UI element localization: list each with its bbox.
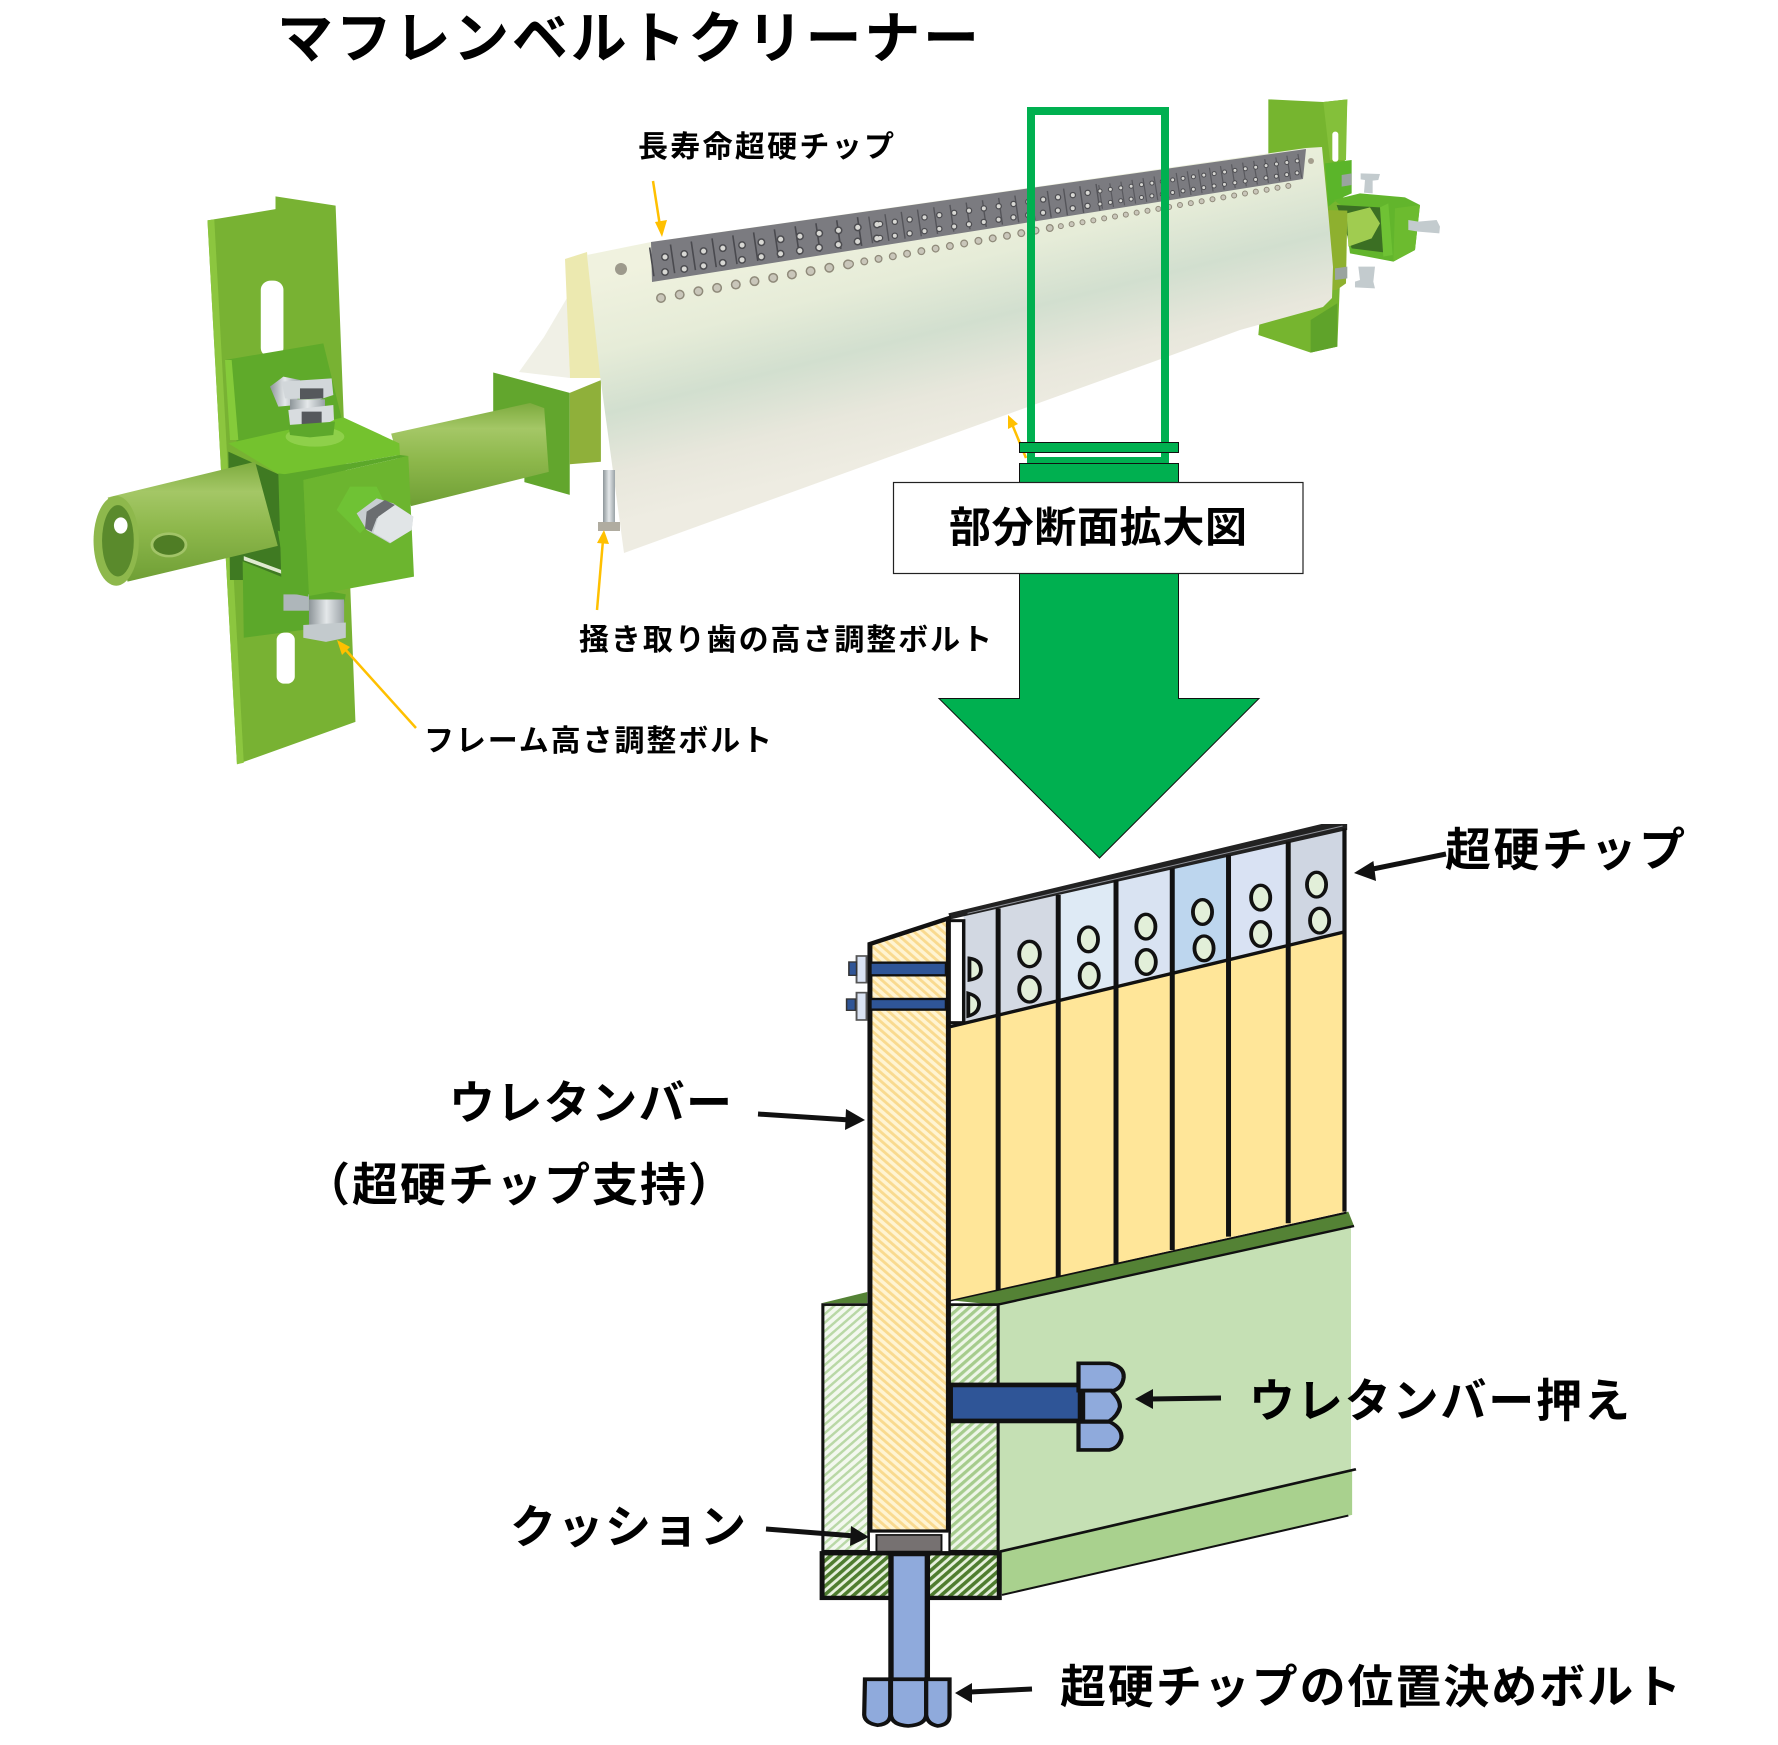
blade rod <box>603 470 615 530</box>
label: carbide chip: 超硬チップ <box>1445 824 1685 876</box>
carbide chips <box>964 828 1346 1022</box>
label: cushion: クッション <box>510 1501 746 1553</box>
green holder face <box>998 1227 1351 1552</box>
chip top edge <box>948 824 1347 919</box>
label: urethane bar: ウレタンバー <box>449 1077 732 1129</box>
chip lower edge <box>950 932 1346 1027</box>
label box: partial section enlarged view <box>894 482 1303 574</box>
section diagram <box>821 824 1356 1726</box>
base plate <box>822 1553 999 1598</box>
arrow: urethane bar <box>758 1109 865 1130</box>
label: carbide chip support: （超硬チップ支持） <box>304 1159 734 1211</box>
left tube <box>108 462 278 582</box>
dividers <box>998 828 1344 1290</box>
holder bolt <box>950 1363 1124 1450</box>
yellow scraper blades <box>950 932 1346 1300</box>
scraper blade <box>519 147 1333 553</box>
left mounting plate and clamp <box>207 196 355 764</box>
chip holes <box>968 872 1329 1016</box>
arrow: position bolt <box>955 1683 1032 1703</box>
section arrow top band <box>1020 442 1178 452</box>
green top strip <box>948 1212 1354 1305</box>
label box: partial section enlarged view: 部分断面拡大図 <box>949 504 1247 551</box>
left block hatch <box>823 1305 869 1551</box>
cushion <box>870 1532 948 1552</box>
right block hatch <box>949 1305 998 1551</box>
title: マフレンベルトクリーナー <box>277 7 979 70</box>
arrow: cushion <box>766 1526 869 1546</box>
label: chip positioning bolt: 超硬チップの位置決めボルト <box>1060 1661 1681 1713</box>
arrow: holder <box>1135 1389 1221 1409</box>
label: frame height adjusting bolt: フレーム高さ調整ボルト <box>424 725 772 758</box>
label: urethane bar holder: ウレタンバー押え <box>1249 1375 1630 1427</box>
upper bolt <box>270 377 300 407</box>
urethane bar <box>870 918 948 1532</box>
lower clamp <box>243 561 346 638</box>
callout arrow: scraper height bolt <box>597 530 609 610</box>
callout arrow: frame height bolt <box>337 640 416 728</box>
flange <box>493 372 570 495</box>
label: long-life carbide chip: 長寿命超硬チップ <box>638 131 894 164</box>
mid tube <box>391 403 549 506</box>
callout arrow: long-life chip <box>653 181 667 237</box>
side bolt <box>337 487 387 533</box>
label: scraper tooth height adjusting bolt: 掻き取り歯の高さ調整ボルト <box>579 624 992 657</box>
photo: belt cleaner product <box>94 99 1440 764</box>
position bolt <box>864 1554 950 1726</box>
callout arrow behind green frame <box>1008 415 1026 458</box>
arrow: chip <box>1354 854 1446 881</box>
big green arrow <box>939 464 1259 858</box>
lower bolt <box>309 599 344 625</box>
green lower strip <box>1000 1471 1352 1595</box>
right end bracket <box>1258 99 1440 353</box>
section frame <box>1031 111 1165 461</box>
top clamp bolts <box>847 921 964 1023</box>
